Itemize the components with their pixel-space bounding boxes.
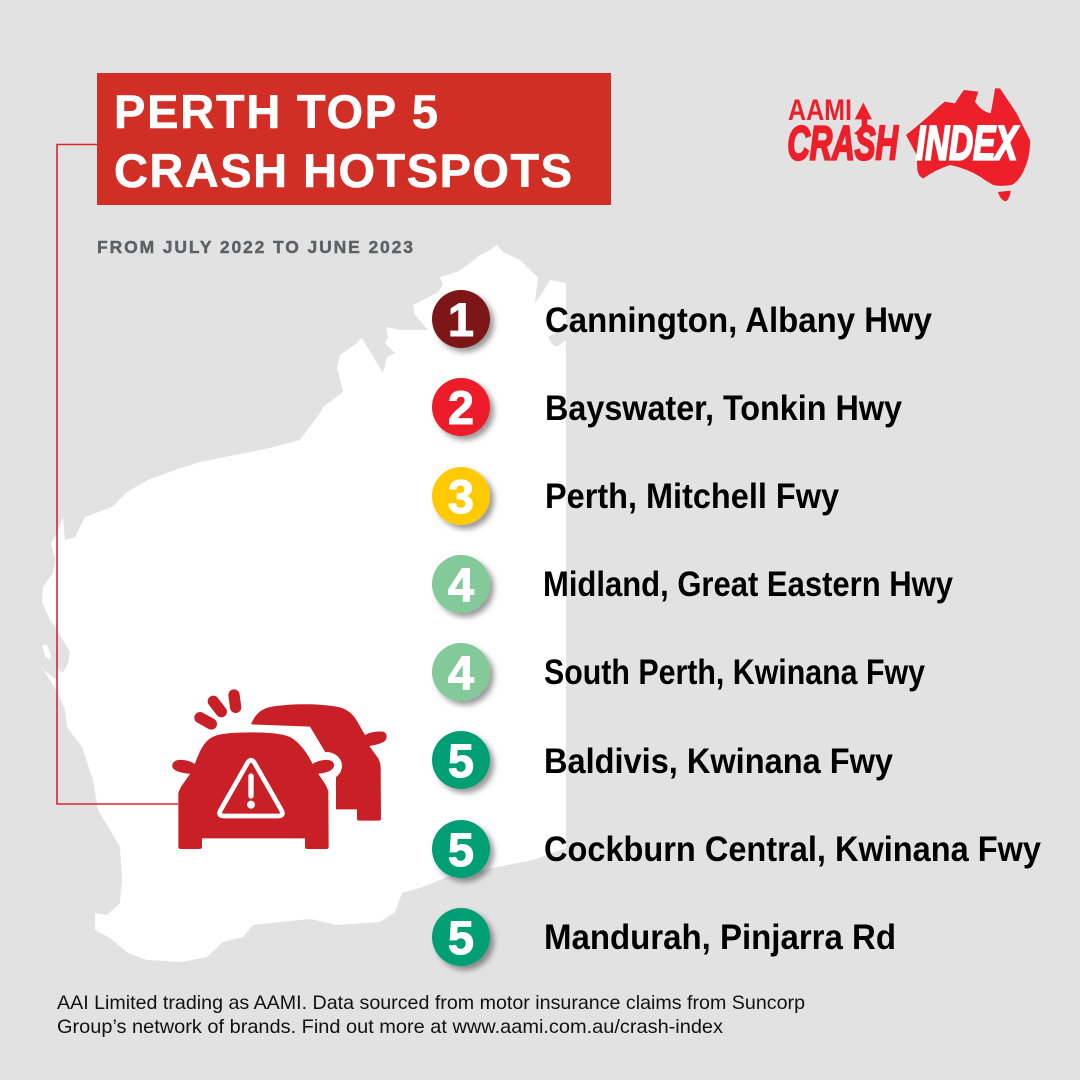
logo wordmark: AAMI: AAMI [788, 94, 852, 127]
list item 1: 1 [448, 293, 474, 346]
front car white outline [178, 732, 329, 849]
list item 1: Cannington, Albany Hwy [545, 301, 932, 340]
list item 5 Mandurah [432, 908, 896, 966]
list item 5 Cockburn Central: 5 [448, 823, 474, 876]
list item 3: 3 [448, 470, 474, 523]
list item 3: Perth, Mitchell Fwy [545, 477, 839, 516]
list item 5 Baldivis: Baldivis, Kwinana Fwy [544, 742, 893, 781]
list item 4 Midland: 4 [448, 558, 474, 611]
title banner [97, 73, 611, 205]
warning triangle [220, 760, 282, 816]
list item 4 South Perth: 4 [448, 646, 474, 699]
front car [178, 732, 329, 849]
list item 4 Midland [432, 555, 953, 613]
list item 4 Midland: Midland, Great Eastern Hwy [543, 565, 953, 604]
list item 5 Cockburn Central [432, 820, 1041, 878]
list item 5 Cockburn Central: Cockburn Central, Kwinana Fwy [544, 830, 1041, 869]
list item 3 [432, 467, 839, 525]
logo: AAMI Crash Index [787, 88, 1030, 201]
footer disclaimer [57, 992, 805, 1038]
list item 5 Baldivis [432, 731, 893, 789]
exclamation mark [247, 773, 255, 809]
logo wordmark: CRASH: CRASH [787, 116, 899, 170]
footer disclaimer: Group’s network of brands. Find out more at www.aami.com.au/crash-index [57, 1016, 723, 1038]
island off west coast [42, 645, 51, 660]
list item 5 Mandurah: 5 [448, 911, 474, 964]
list item 1 [432, 290, 932, 348]
logo arrow [854, 103, 872, 137]
list item 4 South Perth [432, 643, 925, 701]
map: Western Australia silhouette [40, 245, 566, 962]
footer disclaimer: AAI Limited trading as AAMI. Data sourced from motor insurance claims from Suncorp [57, 992, 805, 1014]
logo wordmark: INDEX: INDEX [916, 116, 1019, 170]
rear car [251, 704, 387, 821]
list item 2: Bayswater, Tonkin Hwy [545, 389, 902, 428]
list item 2: 2 [448, 381, 474, 434]
logo: Australia map [906, 88, 1030, 201]
icon: two cars with warning triangle [172, 695, 387, 849]
title banner: CRASH HOTSPOTS [114, 144, 572, 197]
left mirror [172, 760, 195, 774]
list item 5 Mandurah: Mandurah, Pinjarra Rd [544, 918, 896, 957]
title banner: PERTH TOP 5 [114, 85, 438, 138]
connector line [57, 144, 178, 804]
front right mirror outline [311, 752, 342, 780]
list item 4 South Perth: South Perth, Kwinana Fwy [544, 653, 925, 692]
right mirror [313, 760, 334, 774]
list item 5 Baldivis: 5 [448, 734, 474, 787]
subtitle: date range: FROM JULY 2022 TO JUNE 2023 [97, 237, 413, 257]
list item 2 [432, 378, 902, 436]
impact rays [200, 695, 236, 724]
